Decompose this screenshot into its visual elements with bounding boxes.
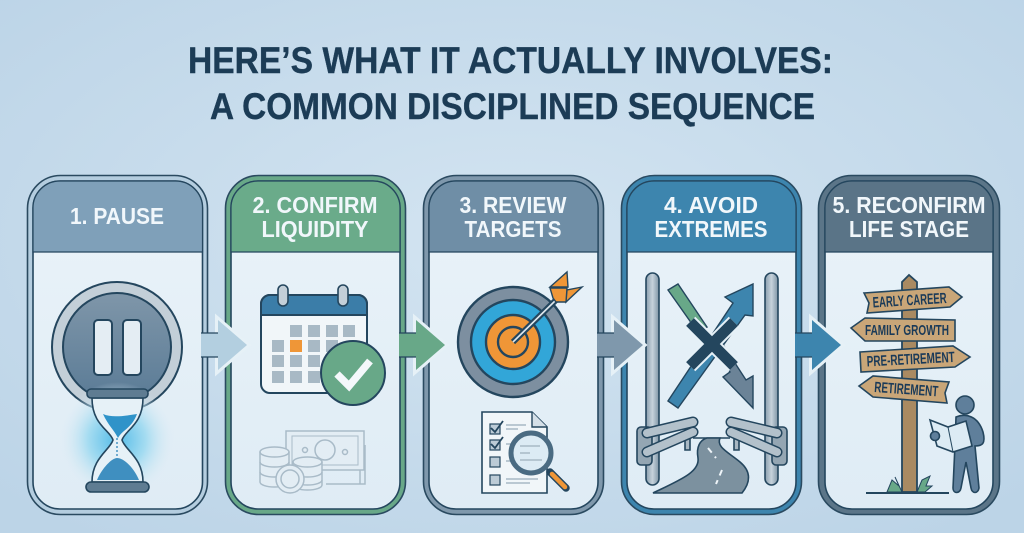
header: 5. reconfirm life stage xyxy=(825,181,993,252)
sign: retirement xyxy=(859,376,949,403)
sign: early career xyxy=(864,287,962,313)
header: 4. avoid extremes xyxy=(627,181,796,252)
arrow: step 2 to 3 xyxy=(399,320,445,370)
heading: 5. reconfirm life stage: 5. RECONFIRM xyxy=(832,192,986,218)
arrow: step 1 to 2 xyxy=(201,320,247,370)
icon: road between guard rails xyxy=(637,422,787,493)
heading: 3. review targets: 3. REVIEW xyxy=(460,192,567,218)
sign: retirement: RETIREMENT xyxy=(874,379,939,400)
icon: right guard post xyxy=(765,273,778,485)
icon: check badge xyxy=(321,341,385,405)
panel: 4. avoid extremes xyxy=(622,176,802,514)
icon: signpost xyxy=(851,275,970,493)
title xyxy=(188,40,833,127)
icon: cash and coins xyxy=(260,431,365,493)
sign: early career: EARLY CAREER xyxy=(872,290,947,311)
icon: hourglass xyxy=(59,382,175,498)
sign: pre-retirement: PRE-RETIREMENT xyxy=(866,349,955,370)
sign: pre-retirement xyxy=(860,346,970,372)
title: HERE’S WHAT IT ACTUALLY INVOLVES: xyxy=(188,40,833,81)
icon: crossed arrows xyxy=(668,284,753,408)
heading: 4. avoid extremes: 4. AVOID xyxy=(664,192,758,218)
sign: family growth xyxy=(851,318,955,341)
sign: family growth: FAMILY GROWTH xyxy=(865,322,949,339)
header: 1. pause xyxy=(33,181,202,252)
title: A COMMON DISCIPLINED SEQUENCE xyxy=(210,86,815,127)
icon: checklist with magnifier xyxy=(482,412,566,493)
heading: 3. review targets: TARGETS xyxy=(464,216,562,242)
icon: person reading map xyxy=(930,396,984,492)
icon: calendar xyxy=(261,285,385,405)
arrow: step 3 to 4 xyxy=(597,320,643,370)
heading: 4. avoid extremes: EXTREMES xyxy=(654,216,768,242)
panel: 2. confirm liquidity xyxy=(226,176,406,514)
heading: 2. confirm liquidity: LIQUIDITY xyxy=(262,216,368,242)
heading: 1. pause: 1. PAUSE xyxy=(70,203,164,229)
icon: pause button xyxy=(52,282,182,412)
heading: 5. reconfirm life stage: LIFE STAGE xyxy=(849,216,969,242)
header: 2. confirm liquidity xyxy=(231,181,400,252)
panel: 3. review targets xyxy=(424,176,604,514)
panel: 5. reconfirm life stage xyxy=(818,176,1000,514)
icon: left guard post xyxy=(646,273,659,485)
panel: 1. pause xyxy=(28,176,208,514)
icon: target with arrow xyxy=(458,272,582,397)
header: 3. review targets xyxy=(429,181,598,252)
arrow: step 4 to 5 xyxy=(795,320,841,370)
heading: 2. confirm liquidity: 2. CONFIRM xyxy=(252,192,378,218)
